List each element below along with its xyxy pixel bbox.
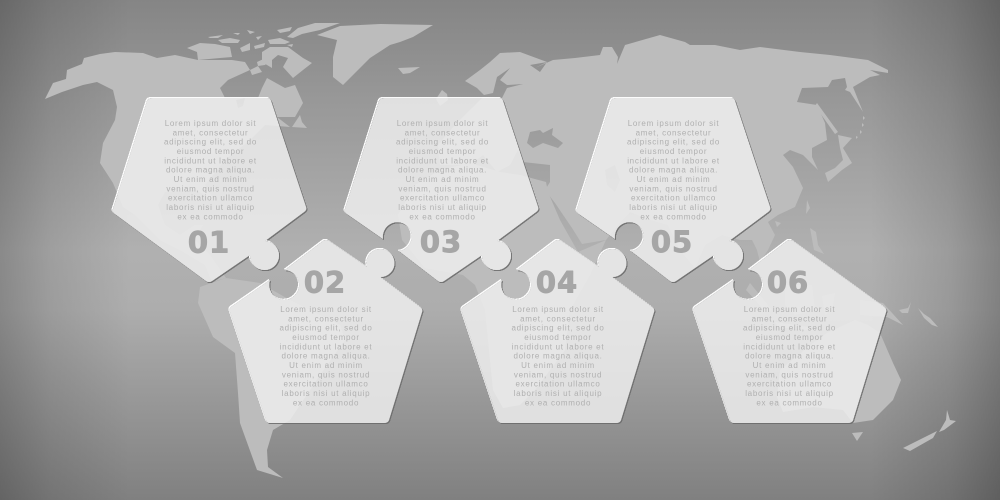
- body text 5: Ut enim ad minim: [637, 175, 710, 184]
- body text 6: amet, consectetur: [752, 314, 827, 323]
- body text 5: dolore magna aliqua.: [629, 166, 718, 175]
- body text 1: veniam, quis nostrud: [166, 184, 255, 193]
- number 05: 05: [651, 225, 693, 259]
- map: australia: [777, 320, 901, 423]
- body text 4: dolore magna aliqua.: [513, 352, 603, 361]
- number 02: 02: [304, 266, 346, 300]
- body text 2: eiusmod tempor: [292, 333, 360, 342]
- panel 6: pentagon puzzle piece: [694, 240, 886, 423]
- body text 6: ex ea commodo: [756, 398, 823, 407]
- body text 2: exercitation ullamco: [283, 380, 369, 389]
- body text 3: eiusmod tempor: [409, 147, 476, 156]
- body text 2: adipiscing elit, sed do: [279, 324, 373, 333]
- panel 1: pentagon puzzle piece: [113, 98, 306, 282]
- body text 2: dolore magna aliqua.: [281, 352, 371, 361]
- body text 4: exercitation ullamco: [515, 380, 601, 389]
- shape 3: [345, 98, 538, 282]
- panel 5: pentagon puzzle piece: [577, 98, 770, 282]
- body text 6: adipiscing elit, sed do: [743, 324, 836, 333]
- map: tasmania: [852, 432, 863, 441]
- map: south america: [198, 278, 345, 478]
- map: united kingdom: [436, 90, 448, 106]
- body text 1: adipiscing elit, sed do: [164, 138, 257, 147]
- body text 4: amet, consectetur: [520, 314, 596, 323]
- shape 4: [462, 240, 654, 423]
- body text 3: laboris nisi ut aliquip: [398, 203, 487, 212]
- body text 5: veniam, quis nostrud: [629, 184, 718, 193]
- shape 5: [577, 98, 770, 282]
- map: new zealand: [903, 410, 956, 451]
- body text 3: Ut enim ad minim: [406, 175, 479, 184]
- panel 4: pentagon puzzle piece: [462, 240, 654, 423]
- body text 2: ex ea commodo: [293, 398, 359, 407]
- body text 4: eiusmod tempor: [524, 333, 592, 342]
- body text 1: laboris nisi ut aliquip: [166, 203, 255, 212]
- body text 3: dolore magna aliqua.: [398, 166, 487, 175]
- shape 6: [694, 240, 886, 423]
- body text 2: Ut enim ad minim: [289, 361, 363, 370]
- body text 6: veniam, quis nostrud: [745, 370, 834, 379]
- body text 3: incididunt ut labore et: [396, 156, 489, 165]
- body text 2: incididunt ut labore et: [280, 342, 372, 351]
- body text 1: eiusmod tempor: [177, 147, 244, 156]
- map: pacific islands: [899, 302, 938, 327]
- body text 3: exercitation ullamco: [400, 194, 485, 203]
- number 06: 06: [767, 266, 809, 300]
- body text 2: veniam, quis nostrud: [282, 370, 370, 379]
- body text 4: laboris nisi ut aliquip: [514, 389, 602, 398]
- body text 3: Lorem ipsum dolor sit: [397, 119, 488, 128]
- body text 2: amet, consectetur: [288, 314, 364, 323]
- body text 5: amet, consectetur: [636, 128, 711, 137]
- body text 3: ex ea commodo: [409, 212, 476, 221]
- map: iceland: [398, 67, 420, 74]
- map: sakhalin, kuril islands and japan: [815, 103, 865, 182]
- body text 4: adipiscing elit, sed do: [511, 324, 605, 333]
- body text 1: exercitation ullamco: [168, 194, 253, 203]
- body text 1: dolore magna aliqua.: [166, 166, 255, 175]
- map: south east asia islands: [746, 200, 903, 331]
- body text 1: Lorem ipsum dolor sit: [165, 119, 256, 128]
- body text 5: exercitation ullamco: [631, 194, 716, 203]
- body text 5: Lorem ipsum dolor sit: [628, 119, 719, 128]
- body text 2: laboris nisi ut aliquip: [282, 389, 370, 398]
- body text 6: incididunt ut labore et: [743, 342, 836, 351]
- body text 2: Lorem ipsum dolor sit: [280, 305, 372, 314]
- body text 5: incididunt ut labore et: [627, 156, 720, 165]
- body text 4: veniam, quis nostrud: [514, 370, 602, 379]
- number 04: 04: [536, 266, 578, 300]
- body text 1: Ut enim ad minim: [174, 175, 247, 184]
- body text 6: eiusmod tempor: [756, 333, 823, 342]
- map: eurasia: [438, 35, 888, 268]
- body text 4: Ut enim ad minim: [521, 361, 595, 370]
- map: africa: [398, 163, 606, 408]
- body text 6: exercitation ullamco: [747, 380, 832, 389]
- body text 6: Lorem ipsum dolor sit: [744, 305, 835, 314]
- body text 4: incididunt ut labore et: [512, 342, 604, 351]
- number 01: 01: [188, 226, 230, 260]
- body text 4: Lorem ipsum dolor sit: [512, 305, 604, 314]
- body text 6: laboris nisi ut aliquip: [745, 389, 834, 398]
- map: canadian arctic islands: [187, 23, 340, 78]
- body text 6: Ut enim ad minim: [753, 361, 826, 370]
- map: north america: [45, 52, 303, 282]
- body text 5: ex ea commodo: [640, 212, 707, 221]
- map: greenland: [317, 24, 433, 85]
- body text 4: ex ea commodo: [525, 398, 591, 407]
- body text 3: veniam, quis nostrud: [398, 184, 487, 193]
- body text 1: amet, consectetur: [173, 128, 248, 137]
- panel 3: pentagon puzzle piece: [345, 98, 538, 282]
- body text 3: amet, consectetur: [405, 128, 480, 137]
- number 03: 03: [420, 225, 462, 259]
- body text 1: ex ea commodo: [177, 212, 244, 221]
- body text 5: eiusmod tempor: [640, 147, 707, 156]
- shape 2: [230, 240, 422, 423]
- panel 2: pentagon puzzle piece: [230, 240, 422, 423]
- body text 6: dolore magna aliqua.: [745, 352, 834, 361]
- body text 5: adipiscing elit, sed do: [627, 138, 720, 147]
- body text 5: laboris nisi ut aliquip: [629, 203, 718, 212]
- shape 1: [113, 98, 306, 282]
- body text 1: incididunt ut labore et: [164, 156, 257, 165]
- map: nova scotia: [292, 115, 307, 128]
- body text 3: adipiscing elit, sed do: [396, 138, 489, 147]
